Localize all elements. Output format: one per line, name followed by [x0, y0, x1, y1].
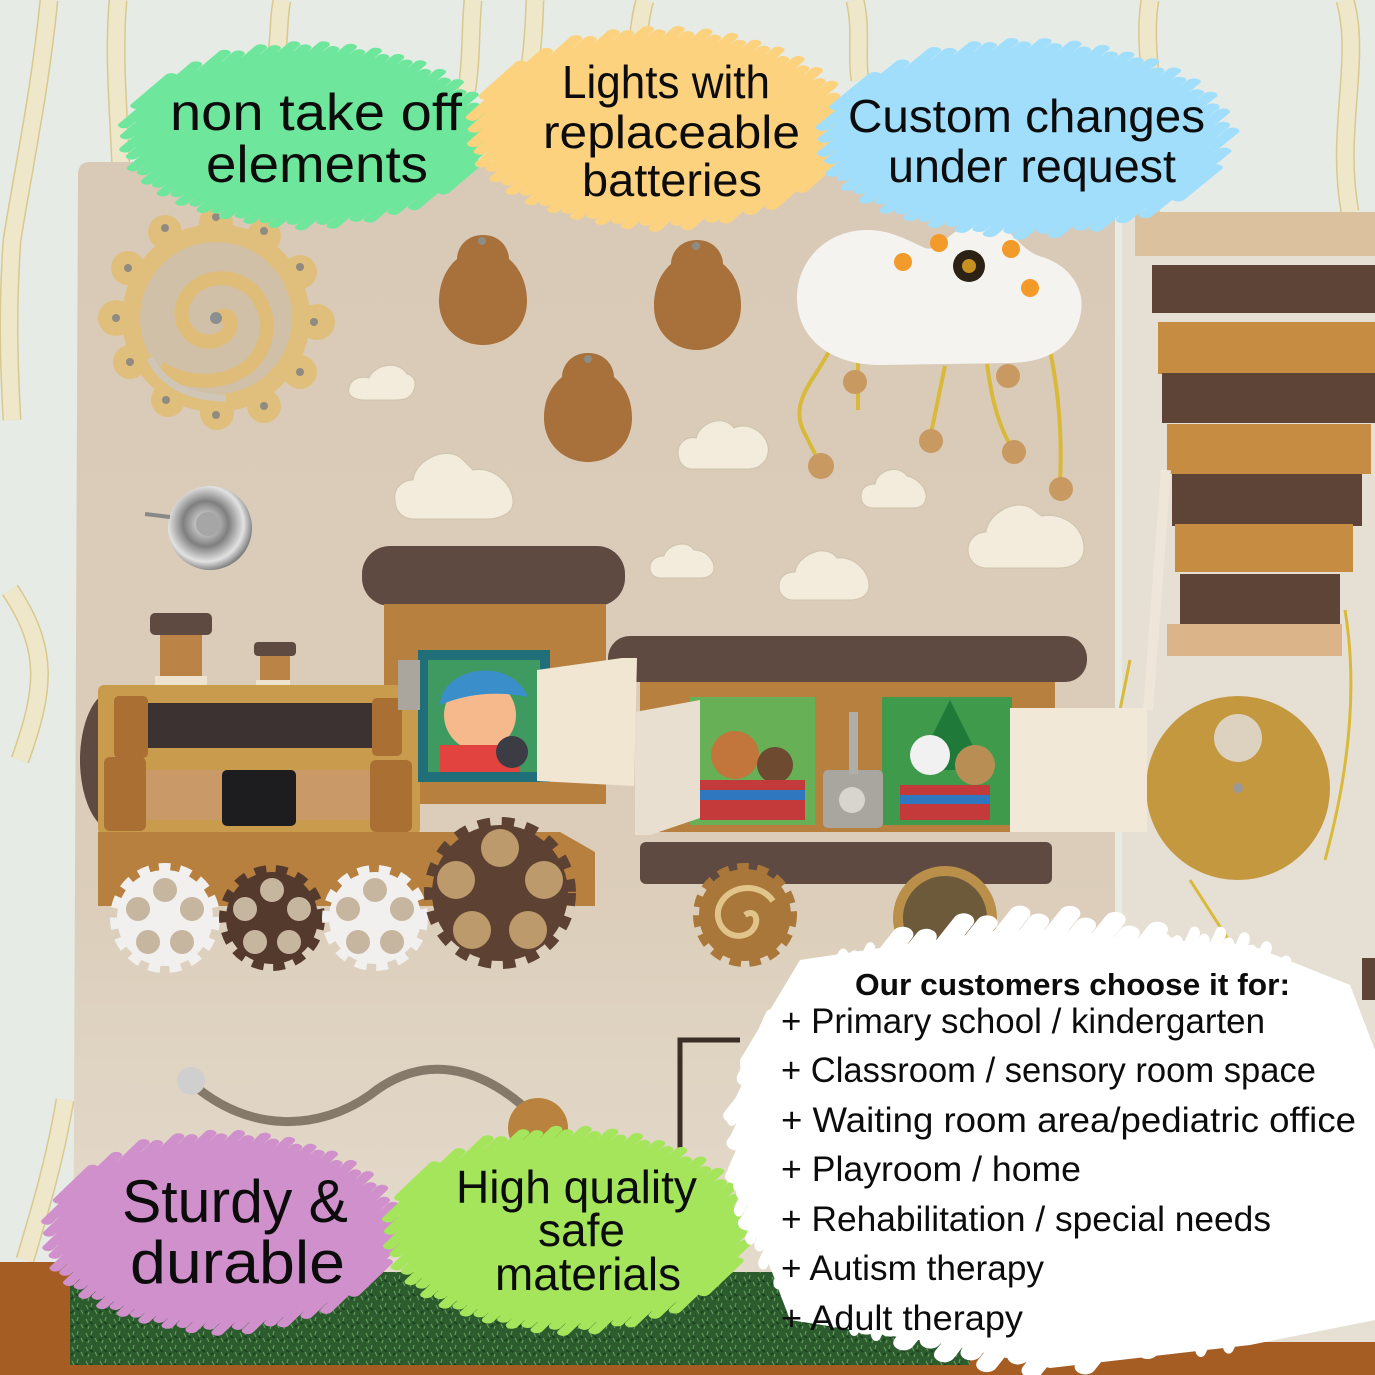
white cloud with lights and beads: [797, 222, 1082, 501]
white gear: [117, 870, 213, 966]
buckle strap: [104, 757, 412, 832]
wagon roof: [608, 636, 1087, 682]
brush label: lights with replaceable batteries: replaceable: [543, 106, 800, 158]
brush label: sturdy and durable: durable: [130, 1229, 345, 1296]
list of uses: + Autism therapy: [781, 1249, 1044, 1288]
brush label: non take off elements: [61, 14, 551, 256]
list of uses: + Rehabilitation / special needs: [781, 1200, 1271, 1239]
wagon body: [640, 682, 1055, 832]
panel heading: Our customers choose it for:: [855, 967, 1290, 1002]
right wooden board: [1122, 212, 1375, 1342]
brush label: lights with replaceable batteries: batteries: [582, 154, 762, 206]
locomotive chimneys: [150, 613, 296, 688]
list of uses: + Waiting room area/pediatric office: [781, 1101, 1356, 1140]
bell: [145, 486, 252, 570]
brush label: high quality safe materials: safe: [538, 1204, 625, 1256]
white gear second: [329, 872, 421, 964]
cabin body: [384, 604, 606, 804]
xylophone: [1135, 212, 1375, 710]
gears: [117, 825, 997, 970]
brush label: lights with replaceable batteries: Lights with: [562, 56, 770, 108]
locomotive body: [98, 685, 420, 835]
large brown gear: [432, 825, 568, 961]
open white doors: [398, 658, 1147, 835]
wooden floor: [0, 1262, 1375, 1375]
locomotive base: [98, 832, 595, 906]
brush label: high quality safe materials: [326, 1095, 810, 1365]
dark brown gear: [226, 872, 318, 964]
brush label: non take off elements: non take off: [170, 84, 463, 142]
list of uses: [781, 1002, 1356, 1338]
wavy slot track: [177, 1040, 740, 1158]
artificial grass strip: [70, 1272, 970, 1365]
door latch: [823, 712, 883, 828]
brush label: high quality safe materials: High quality: [456, 1161, 697, 1213]
small white clouds: [349, 365, 1084, 600]
brush label: lights with replaceable batteries: [407, 0, 913, 260]
wagon left window: [690, 697, 815, 825]
brush label: sturdy and durable: [0, 1100, 458, 1364]
yellow disc with window: [1120, 610, 1351, 950]
round maze: [893, 866, 997, 970]
brush label: custom changes under request: under request: [888, 140, 1176, 192]
small maze gear: [699, 869, 791, 961]
panel: customers choose it for: [627, 837, 1375, 1375]
wagon right window: [882, 697, 1012, 825]
brush label: sturdy and durable: Sturdy &: [122, 1168, 348, 1235]
main wooden board: [73, 162, 1115, 1345]
cabin roof: [362, 546, 625, 606]
locomotive front: [80, 690, 112, 832]
dark strap: [114, 696, 402, 758]
brush label: custom changes under request: Custom changes: [848, 90, 1205, 142]
wagon base: [640, 842, 1052, 884]
list of uses: + Classroom / sensory room space: [781, 1051, 1316, 1090]
cabin window: [418, 650, 550, 782]
list of uses: + Adult therapy: [781, 1299, 1024, 1338]
list of uses: + Playroom / home: [781, 1150, 1081, 1189]
train: [80, 546, 1147, 906]
brown knobs at right edge: [1359, 958, 1375, 1248]
brush label: non take off elements: elements: [206, 136, 428, 194]
list of uses: + Primary school / kindergarten: [781, 1002, 1265, 1041]
sun maze: [98, 205, 335, 430]
wooden weights: [439, 235, 741, 462]
brush label: custom changes under request: [752, 9, 1298, 267]
brush label: high quality safe materials: materials: [495, 1248, 681, 1300]
